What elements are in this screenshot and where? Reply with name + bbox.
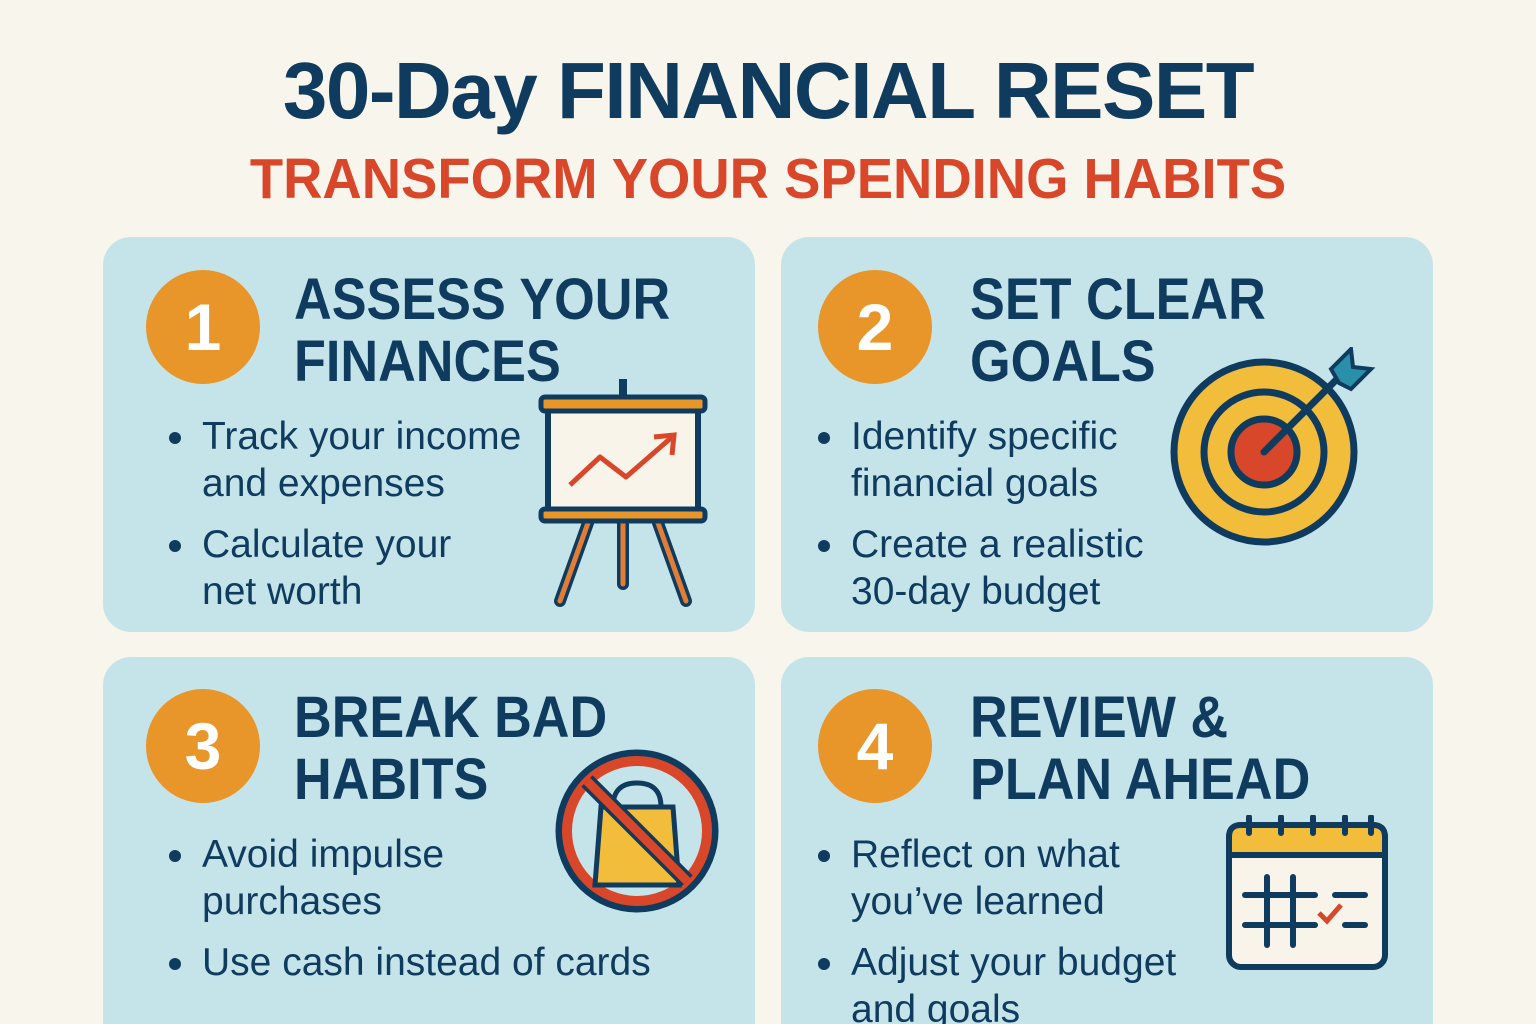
number badge 4 bbox=[818, 689, 932, 803]
heading 2: GOALS bbox=[970, 329, 1156, 394]
icon: target bbox=[1170, 347, 1376, 546]
number badge 2 bbox=[818, 270, 932, 384]
bullets 3 bbox=[169, 833, 651, 984]
heading 1 bbox=[294, 267, 670, 394]
subtitle: TRANSFORM YOUR SPENDING HABITS bbox=[250, 147, 1286, 211]
heading 4 bbox=[970, 685, 1310, 812]
bullets 1: net worth bbox=[202, 570, 362, 613]
heading 1: FINANCES bbox=[294, 329, 561, 394]
bullets 4: Reflect on what bbox=[851, 833, 1120, 876]
heading 1: ASSESS YOUR bbox=[294, 267, 670, 332]
heading 4: PLAN AHEAD bbox=[970, 747, 1310, 812]
panel: assess your finances bbox=[103, 237, 755, 632]
bullets 2: Identify specific bbox=[851, 415, 1118, 458]
bullets 2 bbox=[818, 415, 1144, 613]
bullets 2: 30-day budget bbox=[851, 570, 1100, 613]
bullets 1: Track your income bbox=[202, 415, 521, 458]
panel: break bad habits bbox=[103, 657, 755, 1024]
number badge 4: 4 bbox=[857, 709, 893, 783]
panel: set clear goals bbox=[781, 237, 1433, 632]
heading 3: BREAK BAD bbox=[294, 685, 607, 750]
bullets 1: and expenses bbox=[202, 462, 445, 505]
bullets 4: Adjust your budget bbox=[851, 941, 1176, 984]
heading 4: REVIEW & bbox=[970, 685, 1228, 750]
number badge 1 bbox=[146, 270, 260, 384]
panel: review & plan ahead bbox=[781, 657, 1433, 1024]
icon: calendar bbox=[1226, 815, 1388, 970]
heading 2: SET CLEAR bbox=[970, 267, 1266, 332]
heading 2 bbox=[970, 267, 1266, 394]
heading 3 bbox=[294, 685, 607, 812]
title: 30-Day FINANCIAL RESET bbox=[283, 46, 1253, 135]
heading 3: HABITS bbox=[294, 747, 488, 812]
bullets 4: you’ve learned bbox=[851, 880, 1105, 923]
bullets 3: Avoid impulse bbox=[202, 833, 444, 876]
bullets 3: Use cash instead of cards bbox=[202, 941, 651, 984]
number badge 1: 1 bbox=[185, 290, 221, 364]
bullets 1 bbox=[169, 415, 521, 613]
number badge 3: 3 bbox=[185, 709, 221, 783]
bullets 3: purchases bbox=[202, 880, 382, 923]
number badge 2: 2 bbox=[857, 290, 893, 364]
bullets 4 bbox=[818, 833, 1176, 1024]
bullets 1: Calculate your bbox=[202, 523, 451, 566]
icon: no shopping bbox=[556, 750, 718, 912]
bullets 2: financial goals bbox=[851, 462, 1098, 505]
bullets 2: Create a realistic bbox=[851, 523, 1144, 566]
number badge 3 bbox=[146, 689, 260, 803]
icon: easel chart bbox=[538, 379, 708, 607]
